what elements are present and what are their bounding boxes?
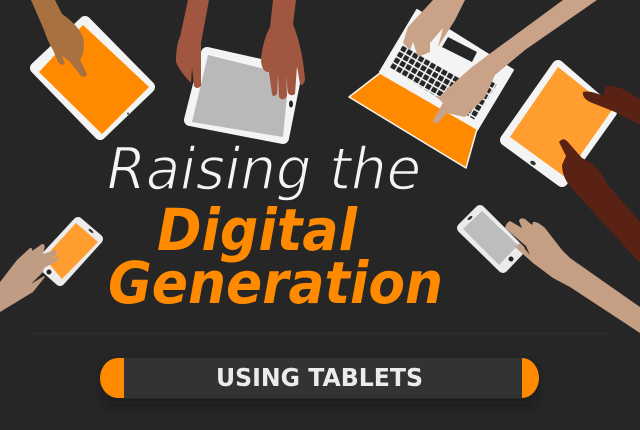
hand: right on grey tablet (261, 0, 305, 99)
laptop keyboard base (380, 10, 513, 130)
banner: using tablets (100, 358, 539, 404)
hand: on left phone (0, 244, 58, 312)
laptop orange lid (349, 73, 477, 168)
hand: on laptop upper (403, 0, 465, 57)
tablet: orange right (506, 66, 612, 181)
banner label: USING TABLETS (216, 363, 423, 392)
tablet: orange top left (36, 22, 149, 134)
hand: brown pointing (31, 0, 87, 77)
banner bar (124, 358, 522, 398)
phone: orange left (40, 222, 98, 281)
hand: dark lower with arm (559, 139, 640, 263)
banner left cap (100, 358, 124, 398)
phone: grey right (462, 210, 520, 268)
laptop keys (389, 45, 497, 120)
hand: on right phone (505, 218, 640, 333)
hand: left on grey tablet (176, 0, 209, 88)
title: Raising the: Raising the (107, 135, 421, 203)
banner right cap (522, 358, 539, 398)
tablet: grey top centre (190, 53, 296, 138)
title: Digital: Digital (157, 196, 358, 264)
title: Generation: Generation (108, 249, 443, 317)
hand: on laptop pointing (433, 0, 597, 123)
laptop (349, 10, 513, 168)
laptop display slot (442, 37, 477, 62)
hand: dark right finger (583, 86, 640, 125)
